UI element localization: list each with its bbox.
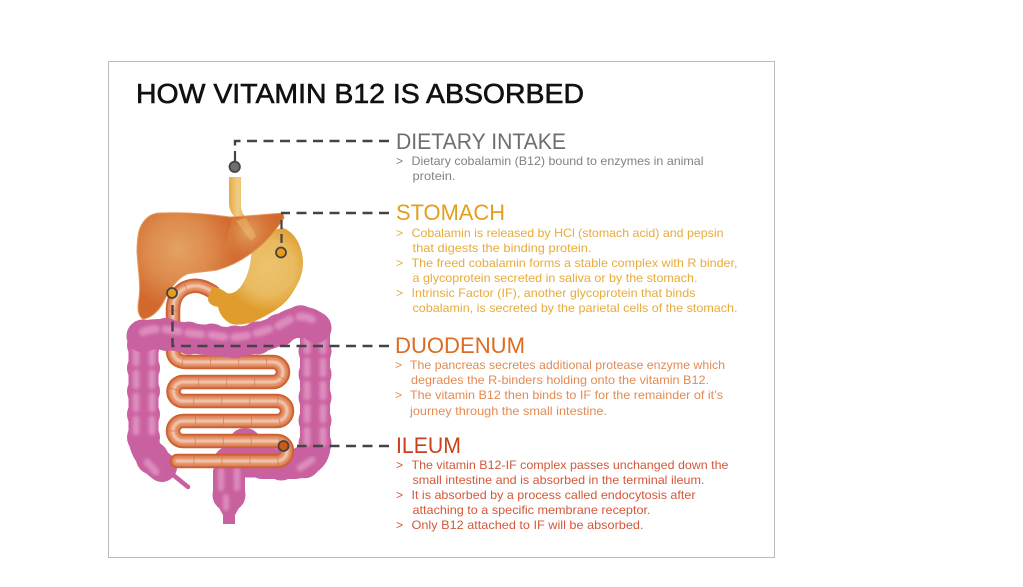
connector: ileum: [278, 441, 389, 451]
icon: stomach: [208, 228, 303, 325]
text: stomach description: >: [396, 226, 403, 240]
text: duodenum description: [395, 358, 725, 418]
section: duodenum: [395, 333, 725, 418]
text: ileum description: It is absorbed by a process called endocytosis after: [412, 488, 696, 502]
colon: transverse section: [143, 317, 316, 342]
connector: duodenum: [167, 288, 389, 346]
text: ileum description: [396, 458, 729, 532]
text: ileum description: >: [396, 488, 403, 502]
heading: duodenum: DUODENUM: [395, 333, 525, 358]
text: duodenum description: journey through the small intestine.: [409, 404, 607, 418]
text: stomach description: >: [396, 286, 403, 300]
text: stomach description: >: [396, 256, 403, 270]
text: dietary intake description: [396, 154, 704, 183]
section: dietary intake: [396, 129, 704, 183]
section: stomach: [396, 200, 738, 315]
icon: esophagus: [229, 177, 247, 221]
text: dietary intake description: Dietary cobalamin (B12) bound to enzymes in animal: [412, 154, 704, 168]
text: ileum description: >: [396, 458, 403, 472]
text: duodenum description: >: [395, 388, 402, 402]
text: duodenum description: The vitamin B12 then binds to IF for the remainder of it’s: [410, 388, 723, 402]
text: stomach description: cobalamin, is secreted by the parietal cells of the stomach.: [412, 301, 738, 315]
text: stomach description: that digests the binding protein.: [412, 241, 592, 255]
text: stomach description: Cobalamin is released by HCl (stomach acid) and pepsin: [412, 226, 724, 240]
text: ileum description: >: [396, 518, 403, 532]
text: dietary intake description: protein.: [412, 169, 456, 183]
text: ileum description: attaching to a specific membrane receptor.: [412, 503, 650, 517]
panel: main frame: [108, 62, 774, 558]
heading: stomach: STOMACH: [396, 200, 505, 225]
illustration: digestive system: [136, 177, 323, 524]
text: stomach description: a glycoprotein secreted in saliva or by the stomach.: [412, 271, 698, 285]
text: ileum description: Only B12 attached to IF will be absorbed.: [412, 518, 644, 532]
connector: dietary intake: [230, 141, 389, 172]
text: stomach description: The freed cobalamin forms a stable complex with R binder,: [412, 256, 738, 270]
section: ileum: [396, 433, 729, 532]
title: HOW VITAMIN B12 IS ABSORBED: [136, 78, 584, 109]
text: dietary intake description: >: [396, 154, 403, 168]
text: ileum description: The vitamin B12-IF complex passes unchanged down the: [412, 458, 729, 472]
text: duodenum description: degrades the R-binders holding onto the vitamin B12.: [411, 373, 709, 387]
icon: liver: [137, 213, 284, 319]
text: stomach description: [396, 226, 738, 315]
small intestine: [173, 286, 287, 461]
colon: lower and side sections: [136, 328, 323, 524]
heading: ileum: ILEUM: [396, 433, 461, 458]
text: duodenum description: >: [395, 358, 402, 372]
text: ileum description: small intestine and is absorbed in the terminal ileum.: [412, 473, 704, 487]
text: stomach description: Intrinsic Factor (IF), another glycoprotein that binds: [412, 286, 696, 300]
connector: stomach: [276, 213, 389, 258]
heading: dietary intake: DIETARY INTAKE: [396, 129, 566, 154]
text: duodenum description: The pancreas secretes additional protease enzyme which: [410, 358, 725, 372]
